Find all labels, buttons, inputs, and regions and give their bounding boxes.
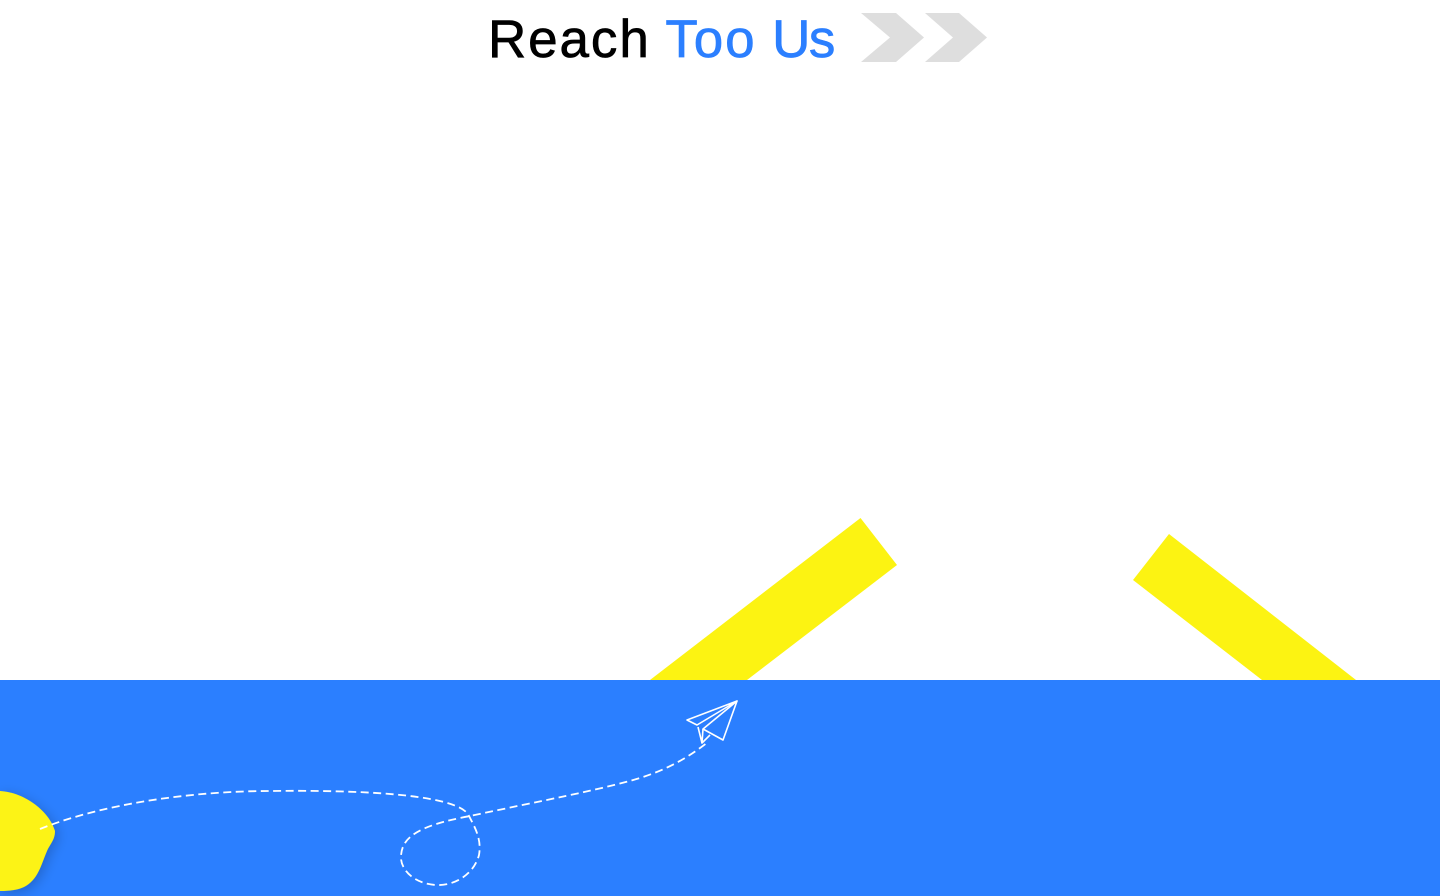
yellow diagonal bar right	[1133, 534, 1356, 680]
dashed flight path	[40, 742, 708, 885]
blue footer band	[0, 680, 1440, 896]
yellow blob	[0, 791, 55, 891]
title: Reach Too Us	[488, 10, 834, 69]
icon: paper plane	[687, 701, 737, 743]
icon: double chevron arrows	[861, 13, 987, 62]
yellow diagonal bar left	[650, 518, 897, 680]
